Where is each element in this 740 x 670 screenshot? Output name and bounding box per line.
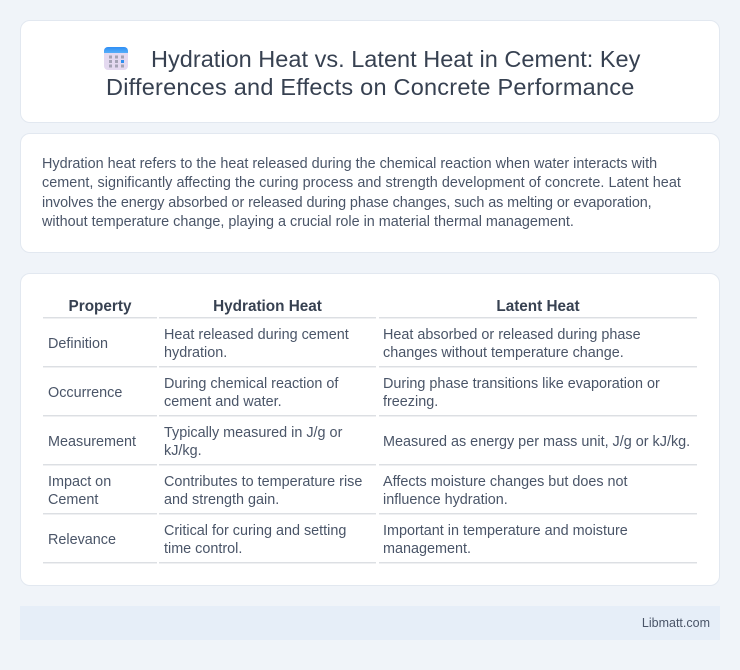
row: impact on cement: Impact on — [48, 474, 111, 490]
comparison table — [43, 298, 697, 564]
row: relevance: management. — [383, 541, 471, 557]
title — [106, 46, 640, 100]
row: impact on cement — [48, 474, 628, 508]
title: Differences and Effects on Concrete Performance — [106, 74, 635, 100]
row: relevance: time control. — [164, 541, 242, 557]
row: measurement: kJ/kg. — [164, 443, 202, 459]
row: impact on cement: Contributes to temperature rise — [164, 474, 362, 490]
row: relevance: Important in temperature and moisture — [383, 523, 628, 539]
row: occurrence: During chemical reaction of — [164, 376, 338, 392]
row: measurement — [48, 425, 690, 459]
intro text: Hydration heat refers to the heat released during the chemical reaction when water interacts with — [42, 156, 657, 172]
table header — [69, 298, 580, 315]
title panel — [20, 20, 720, 123]
table header: Hydration Heat — [213, 298, 322, 315]
row: occurrence: freezing. — [383, 394, 438, 410]
row: relevance: Relevance — [48, 532, 116, 548]
row: occurrence: cement and water. — [164, 394, 282, 410]
row: definition: Heat absorbed or released during phase — [383, 327, 641, 343]
row: occurrence: Occurrence — [48, 385, 122, 401]
icon: calendar — [104, 47, 128, 70]
row: measurement: Typically measured in J/g or — [164, 425, 342, 441]
row: definition — [48, 327, 641, 361]
intro text — [42, 156, 681, 230]
row: impact on cement: Cement — [48, 492, 98, 508]
footer text: Libmatt.com — [642, 616, 710, 630]
row: relevance: Critical for curing and setting — [164, 523, 346, 539]
row: occurrence: During phase transitions like evaporation or — [383, 376, 660, 392]
row: definition: hydration. — [164, 345, 227, 361]
row: measurement: Measured as energy per mass unit, J/g or kJ/kg. — [383, 434, 690, 450]
table header: Property — [69, 298, 131, 315]
row: impact on cement: and strength gain. — [164, 492, 279, 508]
title: Hydration Heat vs. Latent Heat in Cement: Key — [151, 46, 640, 72]
table panel — [20, 273, 720, 586]
row: impact on cement: Affects moisture changes but does not — [383, 474, 628, 490]
intro text: involves the energy absorbed or released during phase changes, such as melting or evaporation, — [42, 195, 652, 211]
row: impact on cement: influence hydration. — [383, 492, 508, 508]
intro text: cement, significantly affecting the curing process and strength development of concrete. Latent heat — [42, 175, 681, 191]
row: occurrence — [48, 376, 660, 410]
row: definition: Definition — [48, 336, 108, 352]
row: relevance — [48, 523, 628, 557]
intro panel — [20, 133, 720, 253]
row: definition: Heat released during cement — [164, 327, 349, 343]
footer bar — [20, 606, 720, 640]
row: definition: changes without temperature change. — [383, 345, 624, 361]
row: measurement: Measurement — [48, 434, 136, 450]
intro text: without temperature change, playing a crucial role in material thermal management. — [42, 214, 574, 230]
table header: Latent Heat — [496, 298, 580, 315]
